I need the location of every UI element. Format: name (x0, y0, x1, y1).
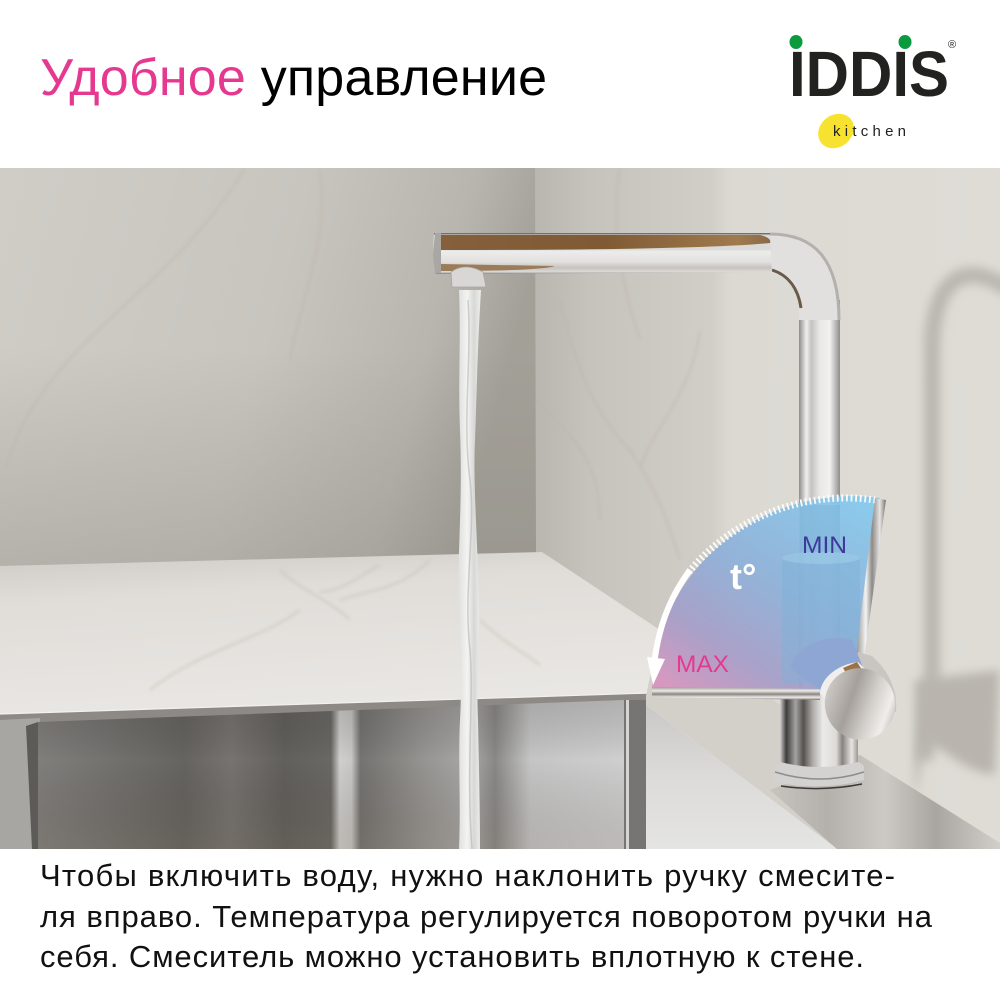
label t°: t° (730, 556, 756, 597)
handle cylinder (850, 652, 896, 712)
aerator (451, 267, 486, 287)
label MIN: MIN (802, 532, 847, 559)
wall shadow of window (925, 275, 1000, 760)
spout lower bronze reflection (441, 264, 555, 271)
faucet base (775, 695, 864, 789)
water twist lines (467, 300, 472, 849)
right floor: sink base light area (646, 705, 837, 849)
handle disc (813, 657, 907, 751)
line 2: ля вправо. Температура регулируется поворотом ручки на (40, 899, 933, 934)
title: Удобное управление (40, 49, 547, 107)
base ring (786, 762, 864, 786)
sink left inner edge (26, 722, 38, 849)
shadow lower patch (915, 670, 1000, 800)
water stream (458, 290, 481, 849)
logo green dots (790, 35, 912, 49)
right handle rod (855, 498, 886, 666)
registered mark: ® (948, 39, 956, 51)
sink right rim (624, 700, 646, 849)
temperature gauge (647, 496, 907, 751)
elbow bend (770, 233, 840, 320)
hidden pipe seen through sector (782, 505, 860, 683)
handle blue ring (790, 638, 862, 690)
handle bright ring (820, 662, 872, 712)
vertical pipe (799, 300, 840, 695)
description text (40, 858, 933, 974)
marble veins (640, 464, 641, 466)
arrow arc (654, 570, 690, 665)
photo: kitchen faucet scene (0, 168, 1000, 849)
left marble wall (0, 168, 540, 568)
sink inner wall (38, 700, 624, 849)
beige surface under the gauge (646, 674, 859, 849)
kitchen label: kitchen (833, 123, 906, 140)
right marble wall (535, 168, 1000, 845)
ticks arc (689, 498, 875, 572)
marble countertop (0, 552, 660, 714)
label MAX: MAX (676, 651, 729, 678)
spout end cap (433, 233, 441, 273)
counter front brushed edge (0, 693, 650, 724)
horizontal spout (433, 233, 772, 274)
steel deck (770, 755, 1000, 849)
logo wordmark: IDDIS (789, 38, 949, 110)
counter veins (150, 560, 540, 690)
base body (780, 695, 858, 767)
counter front thin light line (0, 693, 650, 714)
line 3: себя. Смеситель можно установить вплотную к стене. (40, 939, 864, 974)
faucet spout and pipe (433, 233, 840, 695)
yellow blob (811, 107, 861, 155)
bottom handle rod (652, 687, 820, 700)
spout upper bronze reflection (441, 235, 770, 250)
gradient sector (652, 496, 880, 692)
sink left brushed rim (0, 718, 40, 849)
logo: iddis kitchen (789, 35, 956, 155)
line 1: Чтобы включить воду, нужно наклонить ручку смесите- (40, 858, 895, 893)
arrowhead (647, 657, 665, 685)
